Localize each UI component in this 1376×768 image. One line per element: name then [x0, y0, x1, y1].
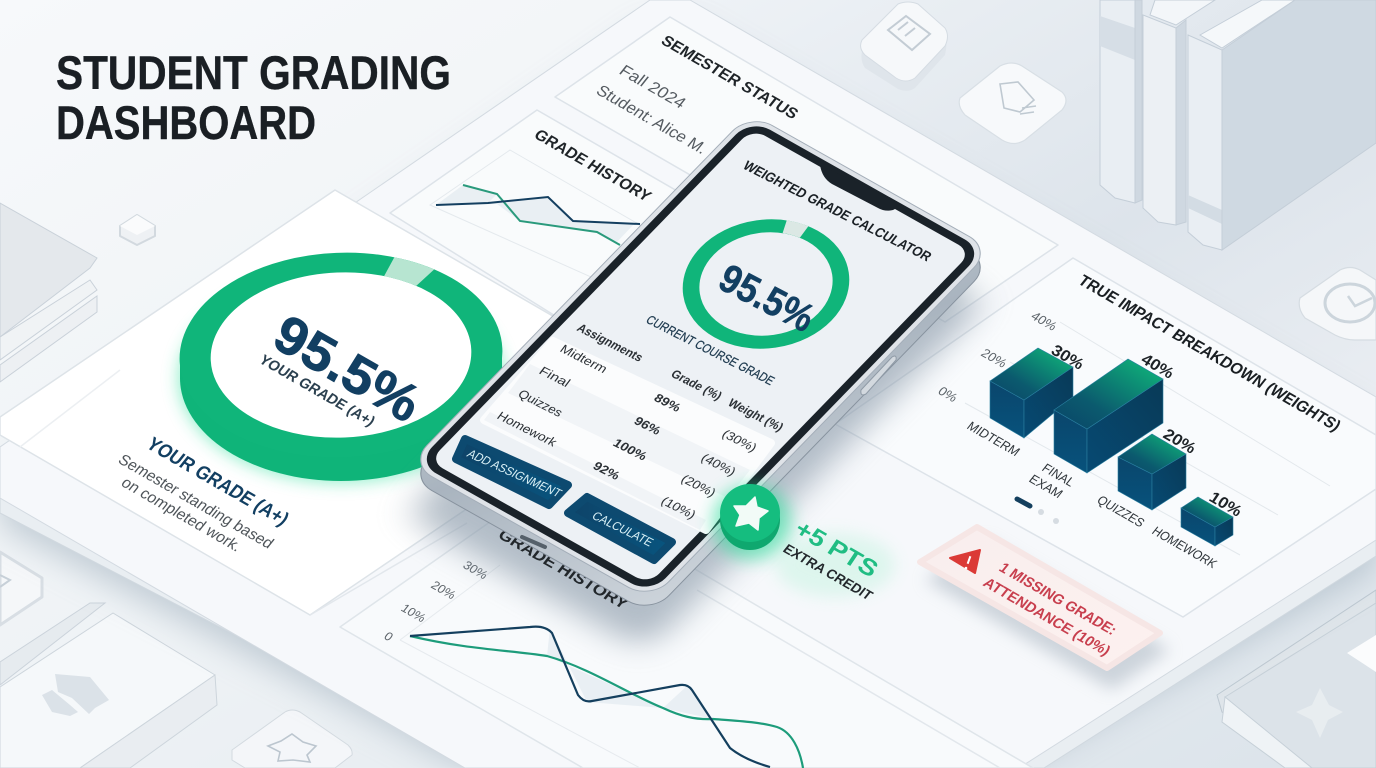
bar: final exam	[1054, 359, 1163, 473]
phone gauge value: 95.5%	[712, 256, 821, 341]
heading: semester status: SEMESTER STATUS	[658, 33, 801, 123]
icon tile: star	[232, 710, 352, 768]
line chart: upper	[436, 185, 640, 245]
bar values: 30%	[1048, 342, 1087, 373]
title	[56, 46, 451, 149]
grade description: Semester standing based	[115, 452, 276, 552]
extra credit points: +5 PTS	[790, 516, 883, 583]
bar values: 10%	[1206, 489, 1245, 520]
title: STUDENT GRADING	[56, 46, 451, 99]
bar labels: MIDTERM	[964, 419, 1023, 459]
line chart: lower	[410, 627, 803, 768]
phone shadow	[404, 165, 987, 652]
axis labels: 40%	[1028, 309, 1060, 334]
alert: missing grade	[920, 527, 1170, 690]
icon: warning triangle	[950, 550, 980, 573]
assignments table: Final	[536, 364, 573, 390]
bar labels: EXAM	[1026, 472, 1066, 501]
extra credit badge	[712, 484, 792, 560]
panel: grade history (lower)	[340, 482, 1033, 768]
bar labels: QUIZZES	[1094, 493, 1148, 530]
phone gauge label: CURRENT COURSE GRADE	[643, 312, 778, 388]
axis labels: 20%	[978, 346, 1010, 371]
book: lower right with star	[1217, 590, 1376, 768]
icon tile: clock	[1299, 268, 1376, 340]
heading: grade history lower: GRADE HISTORY	[495, 527, 632, 613]
bar values: 40%	[1138, 351, 1177, 382]
assignments table: Grade (%)	[668, 367, 725, 403]
axis labels: 0	[381, 629, 396, 644]
assignments table: (30%)	[719, 427, 760, 455]
bar values	[1048, 342, 1245, 520]
bar: quizzes	[1118, 434, 1186, 510]
small cube	[120, 215, 155, 245]
text: student: Student: Alice M.	[593, 82, 711, 158]
button: add assignment: ADD ASSIGNMENT	[464, 447, 565, 500]
panel: true impact breakdown	[835, 258, 1376, 617]
assignments table: Quizzes	[515, 387, 565, 420]
assignments table: 92%	[590, 459, 623, 483]
icon: sparkle	[1296, 688, 1343, 738]
gauge label: YOUR GRADE (A+)	[256, 352, 378, 430]
phone	[409, 113, 992, 614]
axis labels: 10%	[398, 601, 429, 625]
assignments table: (40%)	[698, 451, 739, 479]
extra credit text	[775, 516, 895, 603]
grade description: on completed work.	[118, 475, 245, 555]
book: lower left	[0, 603, 217, 768]
assignments table: 89%	[651, 391, 684, 415]
panel: semester status	[555, 17, 1058, 322]
pager dots	[1017, 499, 1059, 524]
donut gauge	[69, 183, 613, 527]
panel: grade history (upper)	[390, 110, 800, 375]
icon: graduation cap	[42, 674, 109, 716]
bar: homework	[1181, 497, 1233, 546]
bar labels: HOMEWORK	[1149, 524, 1220, 571]
gauge value: 95.5%	[264, 304, 430, 435]
assignments table: (10%)	[658, 494, 699, 522]
side button	[861, 356, 896, 395]
assignments table: 100%	[610, 436, 650, 463]
assignments table: Weight (%)	[725, 396, 786, 434]
assignments table: (20%)	[678, 472, 719, 500]
button: calculate	[568, 497, 672, 560]
bar: midterm	[990, 348, 1073, 438]
extra credit label: EXTRA CREDIT	[780, 541, 877, 603]
calculator heading: WEIGHTED GRADE CALCULATOR	[740, 158, 935, 264]
alert: missing grade: ATTENDANCE (10%)	[980, 575, 1114, 659]
axis labels: 20%	[428, 578, 459, 602]
axis labels	[935, 309, 1060, 405]
assignments table: Homework	[494, 409, 560, 450]
axis labels: 30%	[460, 558, 491, 582]
bar values: 20%	[1160, 426, 1199, 457]
bar labels	[964, 419, 1220, 571]
phone gauge	[627, 177, 905, 391]
assignments table: 96%	[631, 414, 664, 438]
text: term: Fall 2024	[616, 62, 689, 112]
axis labels	[381, 558, 491, 644]
books: top right	[1100, 0, 1376, 250]
assignments table	[484, 321, 786, 530]
alert text: 1 MISSING GRADE:	[996, 560, 1120, 639]
button: calculate: CALCULATE	[589, 509, 656, 549]
title: DASHBOARD	[56, 96, 316, 149]
icon tile: graduation cap	[959, 63, 1066, 144]
grade heading: YOUR GRADE (A+)	[142, 434, 293, 530]
assignments table: Midterm	[557, 342, 610, 376]
notch	[820, 165, 903, 211]
bar labels: FINAL	[1039, 461, 1078, 489]
heading: grade history: GRADE HISTORY	[531, 127, 654, 205]
heading: true impact: TRUE IMPACT BREAKDOWN (WEIGHTS)	[1075, 272, 1344, 435]
icon tile: document	[861, 2, 948, 91]
left grade card	[0, 183, 660, 615]
icon tile: lower left edge	[0, 552, 42, 625]
assignments table: Assignments	[574, 321, 646, 364]
axis labels: 0%	[935, 384, 961, 405]
speaker	[522, 537, 545, 547]
icon: star	[734, 497, 768, 530]
book: left stack	[0, 203, 97, 382]
